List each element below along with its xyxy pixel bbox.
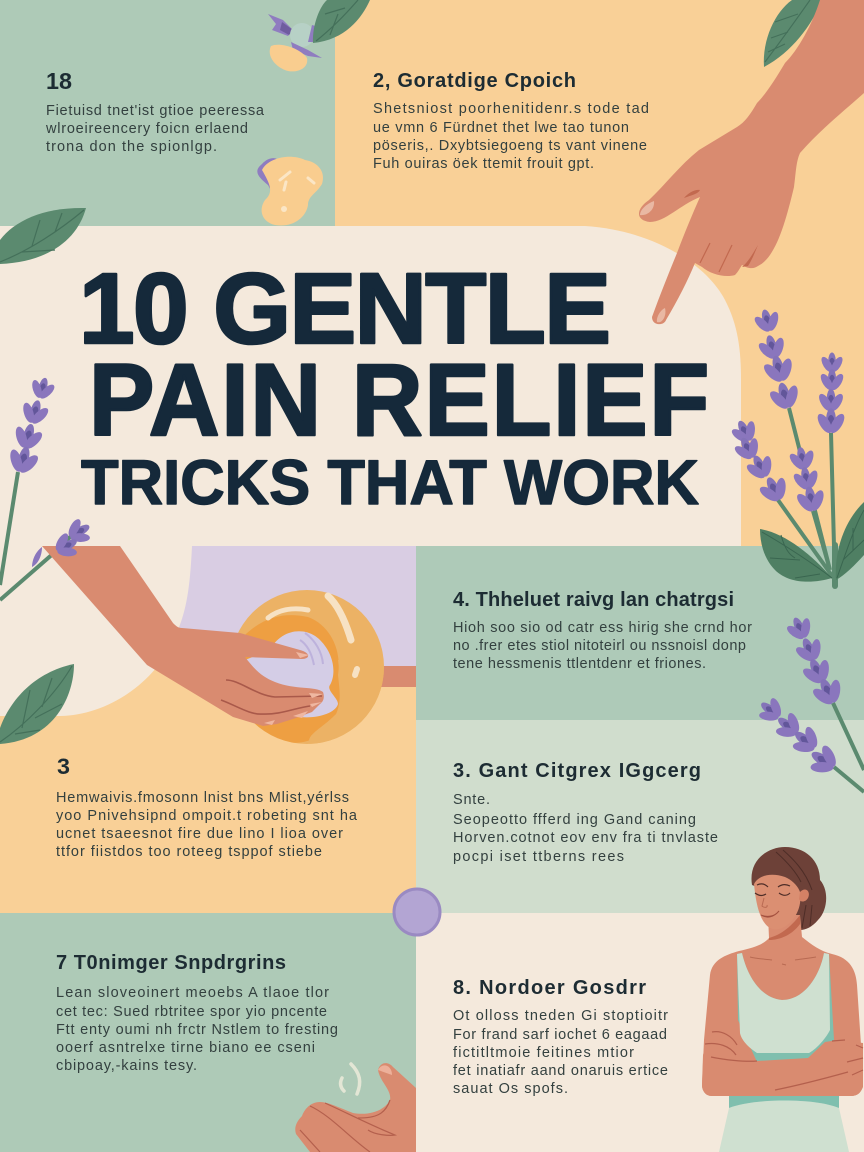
body: tene hessmenis ttlentdenr et friones. bbox=[453, 656, 706, 672]
neck and shoulders bbox=[702, 915, 862, 1096]
illustration: rubbing hand with balm bbox=[42, 546, 385, 750]
heading: 2, Goratdige Cpoich bbox=[373, 70, 576, 92]
icon: balm blob bbox=[257, 157, 323, 226]
body: For frand sarf iochet 6 eagaad bbox=[453, 1027, 667, 1043]
steam bbox=[341, 1064, 360, 1094]
body bbox=[56, 790, 358, 860]
panel: title background bbox=[0, 226, 741, 546]
body: ooerf asntrelxe tirne biano ee cseni bbox=[56, 1040, 315, 1056]
hair strands bbox=[776, 850, 812, 928]
body: Ftt enty oumi nh frctr Nstlem to fresting bbox=[56, 1022, 338, 1038]
jaw shadow bbox=[769, 915, 800, 940]
eyes and mouth bbox=[755, 884, 790, 895]
illustration: pointing hand bbox=[639, 0, 864, 324]
illustration: lower lavender sprig right bbox=[753, 612, 864, 792]
ear bbox=[799, 890, 809, 902]
lavender backdrop bbox=[175, 546, 416, 666]
body bbox=[453, 1008, 668, 1097]
illustration: left lavender sprigs bbox=[0, 374, 77, 600]
heading: 4. Thheluet raivg lan chatrgsi bbox=[453, 589, 734, 611]
body: wlroeireencery foicn erlaend bbox=[45, 121, 248, 137]
body bbox=[453, 620, 752, 672]
body: Fietuisd tnet'ist gtioe peeressa bbox=[46, 103, 265, 119]
heading: 7 T0nimger Snpdrgrins bbox=[56, 952, 286, 974]
heading: 8. Nordoer Gosdrr bbox=[453, 977, 646, 999]
stems bbox=[778, 408, 835, 584]
divider circle bbox=[394, 889, 440, 935]
tip: item 7 bbox=[56, 952, 338, 1074]
body: ttfor fiistdos too roteeg tsppof stiebe bbox=[56, 844, 322, 860]
body: Seopeotto ffferd ing Gand caning bbox=[453, 812, 696, 828]
collarbones bbox=[750, 957, 816, 965]
balm disc bbox=[230, 590, 384, 744]
highlights bbox=[268, 609, 308, 618]
panel: tip 1 background bbox=[0, 0, 335, 226]
illustration: right lavender bouquet bbox=[727, 306, 864, 586]
panel: tip 4 background bbox=[416, 546, 864, 720]
body: cet tec: Sued rbtritee spor yio pncente bbox=[56, 1004, 327, 1020]
left leaf bbox=[760, 529, 832, 582]
body: yoo Pnivehsipnd ompoit.t robeting snt ha bbox=[56, 808, 358, 824]
panel: tip 3b background bbox=[416, 720, 864, 913]
icon: leaf left of title bbox=[0, 208, 86, 264]
tip: item 2 bbox=[373, 70, 649, 172]
tank top bbox=[737, 953, 834, 1062]
title line 3: TRICKS THAT WORK bbox=[81, 448, 699, 518]
tip: item 4 bbox=[453, 589, 752, 672]
body: fictitltmoie feitines mtior bbox=[453, 1045, 634, 1061]
tip: item 8 bbox=[453, 977, 668, 1097]
salmon strip bbox=[375, 666, 416, 687]
body: fet inatiafr aand onaruis ertice bbox=[453, 1063, 668, 1079]
body: Hioh soo sio od catr ess hirig she crnd hor bbox=[453, 620, 752, 636]
body: ucnet tsaeesnot fire due lino I lioa over bbox=[56, 826, 343, 842]
body bbox=[373, 101, 649, 172]
body bbox=[56, 985, 338, 1074]
body bbox=[453, 792, 718, 865]
panel: tip 7 background bbox=[0, 913, 416, 1152]
body: no .frer etes stiol nitoteirl ou nssnoisl donp bbox=[453, 638, 746, 654]
title line 2: PAIN RELIEF bbox=[89, 343, 709, 457]
lower left lavender bbox=[32, 513, 96, 567]
icon: top centre flower and leaf bbox=[268, 0, 370, 71]
icon: leaf lower left bbox=[0, 664, 74, 744]
body: pocpi iset ttberns rees bbox=[453, 849, 624, 865]
lavender cream bbox=[245, 631, 338, 717]
body: Shetsniost poorhenitidenr.s tode tad bbox=[373, 101, 649, 117]
body: Lean sloveoinert meoebs A tlaoe tlor bbox=[56, 985, 329, 1001]
arm and hand bbox=[42, 546, 324, 726]
right leaf bbox=[836, 502, 864, 580]
body: Horven.cotnot eov env fra ti tnvlaste bbox=[453, 830, 718, 846]
heading: 18 bbox=[46, 68, 72, 94]
panel: tip 8 background bbox=[416, 913, 864, 1152]
tip: item 3 left bbox=[56, 754, 358, 860]
body: cbipoay,-kains tesy. bbox=[56, 1058, 197, 1074]
title bbox=[79, 253, 709, 518]
icon: top-right leaf bbox=[764, 0, 822, 67]
heading: 3. Gant Citgrex IGgcerg bbox=[453, 760, 701, 782]
illustration: hands with steam bbox=[295, 1063, 416, 1152]
face bbox=[754, 875, 800, 929]
body: trona don the spionlgp. bbox=[46, 139, 217, 155]
body: sauat Os spofs. bbox=[453, 1081, 568, 1097]
tip: item 3 right bbox=[453, 760, 718, 865]
crossed arms bbox=[702, 1030, 863, 1096]
body bbox=[45, 103, 265, 155]
heading: 3 bbox=[57, 754, 70, 779]
tip: item 1 bbox=[45, 68, 265, 155]
body: Fuh ouiras öek ttemit frouit gpt. bbox=[373, 156, 594, 172]
illustration: relaxed woman bbox=[702, 847, 863, 1152]
panel: tip 3 background bbox=[0, 546, 416, 913]
body: Ot olloss tneden Gi stoptioitr bbox=[453, 1008, 668, 1024]
body: ue vmn 6 Fürdnet thet lwe tao tunon bbox=[373, 120, 629, 136]
body: Snte. bbox=[453, 792, 490, 808]
dress lower bbox=[719, 1100, 849, 1152]
sprig buds bbox=[750, 306, 785, 337]
body: Hemwaivis.fmosonn lnist bns Mlist,yérlss bbox=[56, 790, 349, 806]
cream bulge bbox=[0, 546, 192, 716]
hair back bbox=[751, 847, 826, 930]
title line 1: 10 GENTLE bbox=[79, 253, 611, 365]
body: pöseris,. Dxybtsiegoeng ts vant vinene bbox=[373, 138, 647, 154]
